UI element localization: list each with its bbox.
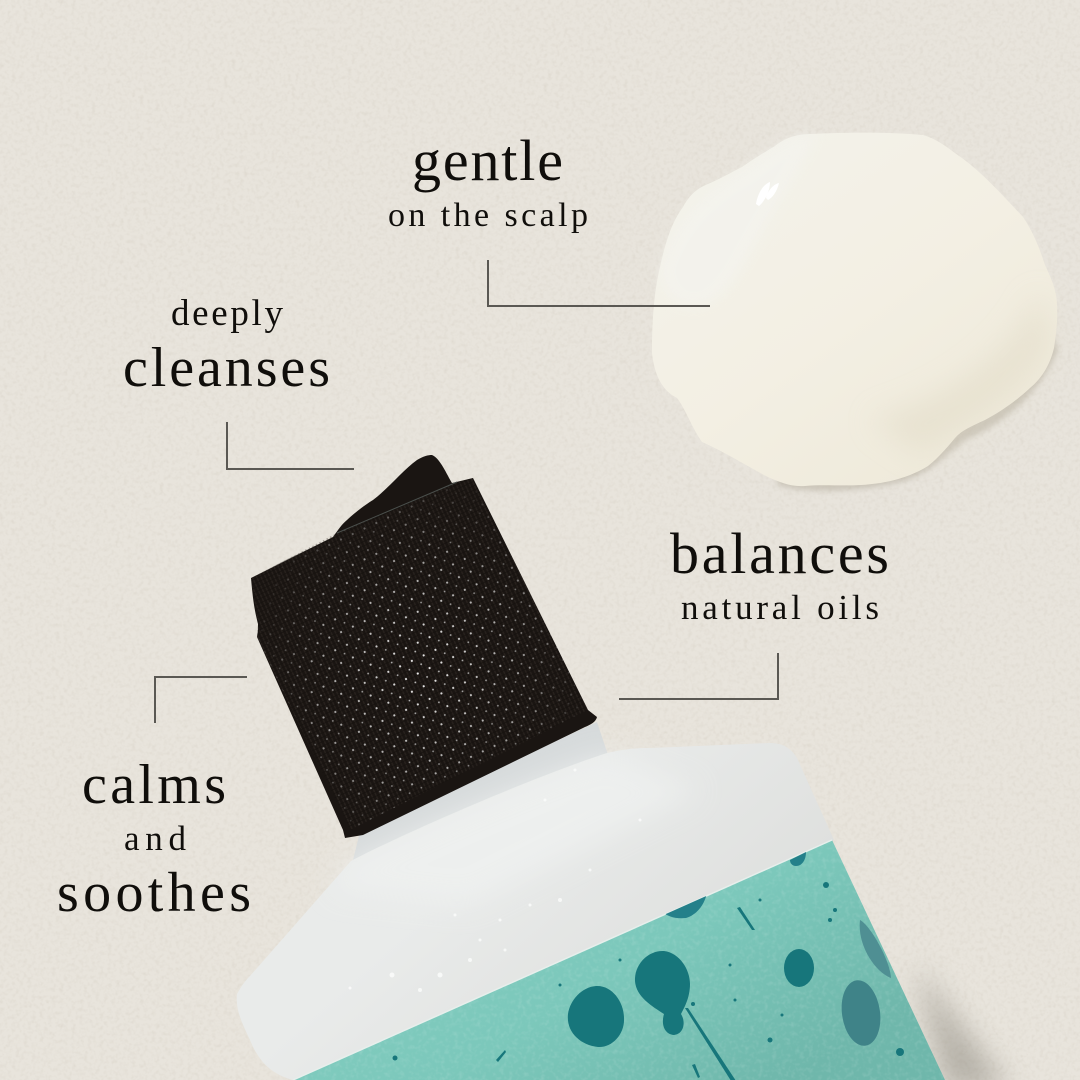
cap ribbing bbox=[251, 478, 588, 830]
callout line: cleanses bbox=[227, 422, 354, 469]
teal label band bbox=[293, 840, 945, 1080]
cap seam bbox=[337, 482, 457, 533]
text: balances natural oils: natural oils bbox=[681, 588, 879, 627]
text: gentle on the scalp: gentle bbox=[412, 128, 563, 193]
text: calms and soothes: and bbox=[124, 819, 186, 858]
bottle shadow bbox=[915, 965, 1010, 1080]
text: calms and soothes bbox=[57, 754, 251, 924]
callout line: calms bbox=[155, 677, 247, 723]
text: deeply cleanses: deeply bbox=[171, 293, 284, 334]
text: deeply cleanses bbox=[123, 293, 330, 399]
bottle shoulder bbox=[237, 743, 834, 1080]
bottle neck bbox=[352, 722, 608, 864]
text: balances natural oils: balances bbox=[670, 521, 889, 586]
cream swatch bbox=[652, 133, 1058, 491]
water droplets on shoulder bbox=[348, 768, 642, 992]
callout line: gentle bbox=[488, 260, 710, 306]
text: deeply cleanses: cleanses bbox=[123, 337, 330, 399]
text: calms and soothes: calms bbox=[82, 754, 226, 816]
lit shoulder facet bbox=[330, 753, 700, 905]
text: balances natural oils bbox=[670, 521, 889, 627]
cap water drops bbox=[251, 478, 588, 830]
callout line: balances bbox=[619, 653, 778, 699]
text: calms and soothes: soothes bbox=[57, 862, 251, 924]
black flip cap bbox=[251, 455, 597, 838]
text: gentle on the scalp: on the scalp bbox=[388, 197, 588, 234]
paint spots bbox=[392, 852, 904, 1080]
text: gentle on the scalp bbox=[388, 128, 588, 234]
